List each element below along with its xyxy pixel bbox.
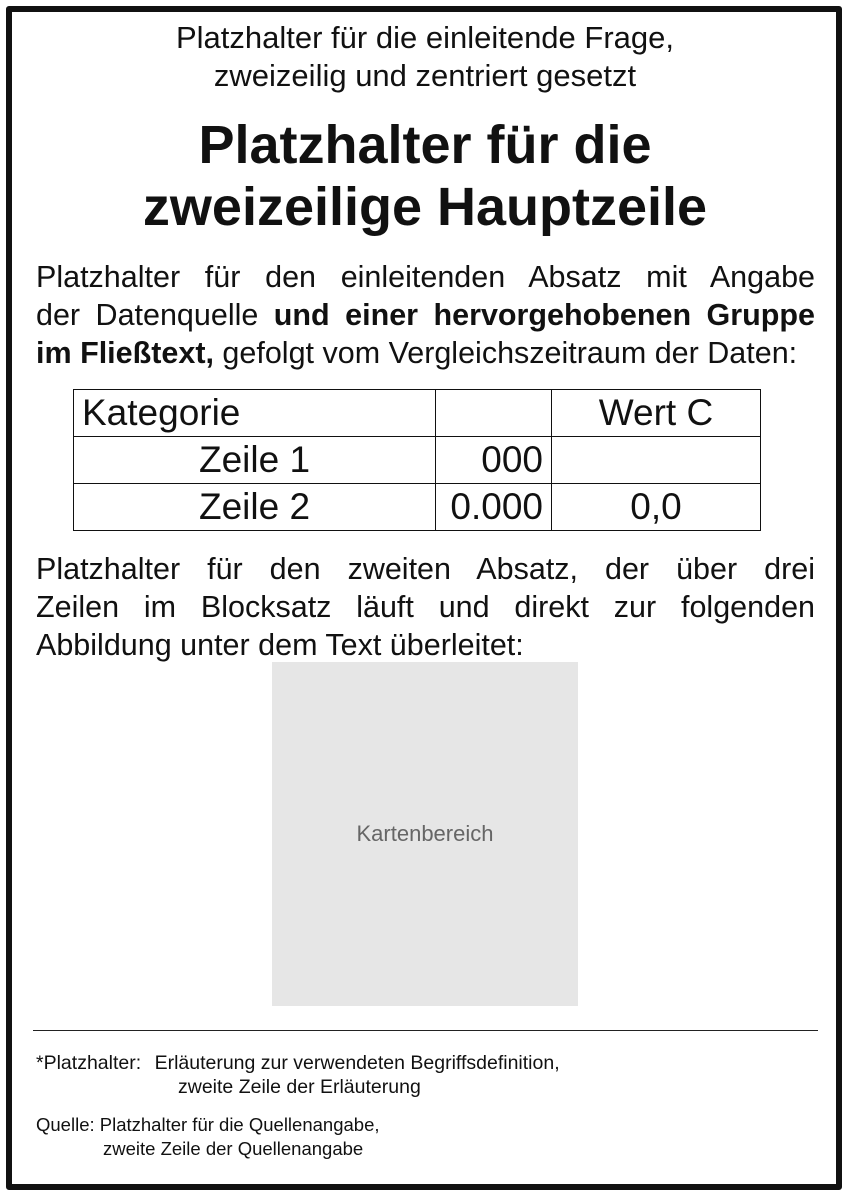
table row one [199,439,543,480]
table header row [82,392,713,527]
intro text block: der Datenquelle und einer hervorgehobenen Gruppe [36,298,815,332]
table header row: Kategorie [82,392,240,433]
data table [73,389,761,531]
table row one: 000 [481,439,543,480]
main title [143,115,707,237]
intro heading [176,20,674,93]
table row one: Zeile 1 [199,439,310,480]
table row two [199,486,682,527]
intro heading: zweizeilig und zentriert gesetzt [214,58,636,93]
table row two: 0,0 [630,486,682,527]
table row two: 0.000 [450,486,543,527]
source note: zweite Zeile der Quellenangabe [103,1138,363,1159]
source note: Quelle: Platzhalter für die Quellenangabe, [36,1114,380,1135]
footnote [36,1052,560,1098]
footnote: *Platzhalter: Erläuterung zur verwendeten Begriffsdefinition, [36,1052,560,1074]
map placeholder [272,662,578,1006]
second text block: Zeilen im Blocksatz läuft und direkt zur folgenden [36,590,815,624]
source note [36,1114,380,1159]
intro text block: Platzhalter für den einleitenden Absatz mit Angabe [36,260,815,294]
main title: zweizeilige Hauptzeile [143,177,707,237]
map placeholder: Kartenbereich [356,821,493,846]
footnote divider [33,1030,818,1031]
intro heading: Platzhalter für die einleitende Frage, [176,20,674,55]
table row two: Zeile 2 [199,486,310,527]
second text block [36,552,815,662]
intro text block: im Fließtext, gefolgt vom Vergleichszeitraum der Daten: [36,336,797,370]
second text block: Platzhalter für den zweiten Absatz, der über drei [36,552,815,586]
table header row: Wert C [599,392,713,433]
main title: Platzhalter für die [198,115,652,175]
intro text block [36,260,815,370]
footnote: zweite Zeile der Erläuterung [178,1076,421,1098]
second text block: Abbildung unter dem Text überleitet: [36,628,524,662]
